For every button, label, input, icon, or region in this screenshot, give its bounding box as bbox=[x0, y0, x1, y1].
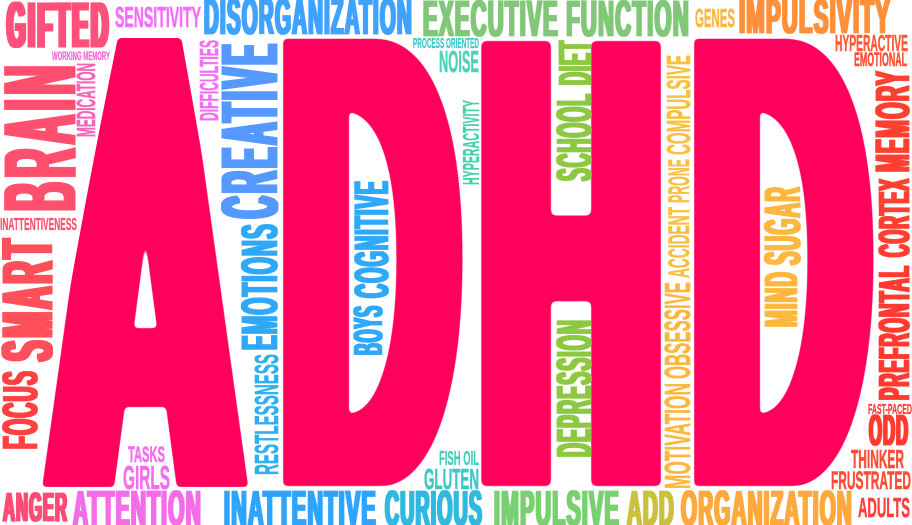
column of words between A and D: GIRLS bbox=[123, 459, 170, 496]
word: WORKING MEMORY: WORKING MEMORY bbox=[52, 50, 110, 63]
left column of words: INATTENTIVENESS bbox=[0, 214, 77, 234]
words inside the letters: BOYS bbox=[345, 305, 391, 355]
words inside the letters: GLUTEN bbox=[424, 464, 479, 496]
top row of words bbox=[7, 0, 908, 79]
word: TASKS: TASKS bbox=[128, 442, 165, 467]
words inside the letters: DEPRESSION bbox=[548, 319, 602, 457]
words inside the letters: SUGAR bbox=[754, 186, 811, 265]
right column of words bbox=[831, 70, 912, 523]
top row of words: PROCESS ORIENTED bbox=[413, 36, 479, 52]
bottom row of words bbox=[3, 482, 853, 525]
left column of words bbox=[0, 61, 101, 449]
words inside the letters: FISH OIL bbox=[439, 448, 479, 470]
words inside the letters: HYPERACTIVITY bbox=[458, 100, 484, 185]
words inside the letters: MIND bbox=[755, 271, 807, 327]
heading: giant ADHD letters bbox=[42, 38, 874, 487]
column of words between H and D: MOTIVATION bbox=[657, 383, 698, 489]
top row of words: NOISE bbox=[439, 45, 479, 79]
words inside the letters bbox=[345, 40, 811, 496]
words inside the letters: COGNITIVE bbox=[346, 180, 399, 298]
column of words between A and D: EMOTIONS bbox=[231, 223, 288, 350]
column of words between A and D bbox=[123, 40, 294, 496]
column of words between H and D: ACCIDENT bbox=[663, 207, 696, 278]
column of words between H and D bbox=[657, 55, 698, 489]
column of words between H and D: PRONE bbox=[663, 159, 696, 203]
column of words between H and D: OBSESSIVE bbox=[657, 282, 698, 379]
top row of words: SENSITIVITY bbox=[115, 2, 201, 34]
column of words between A and D: RESTLESSNESS bbox=[248, 354, 285, 475]
top row of words: GENES bbox=[695, 3, 735, 33]
